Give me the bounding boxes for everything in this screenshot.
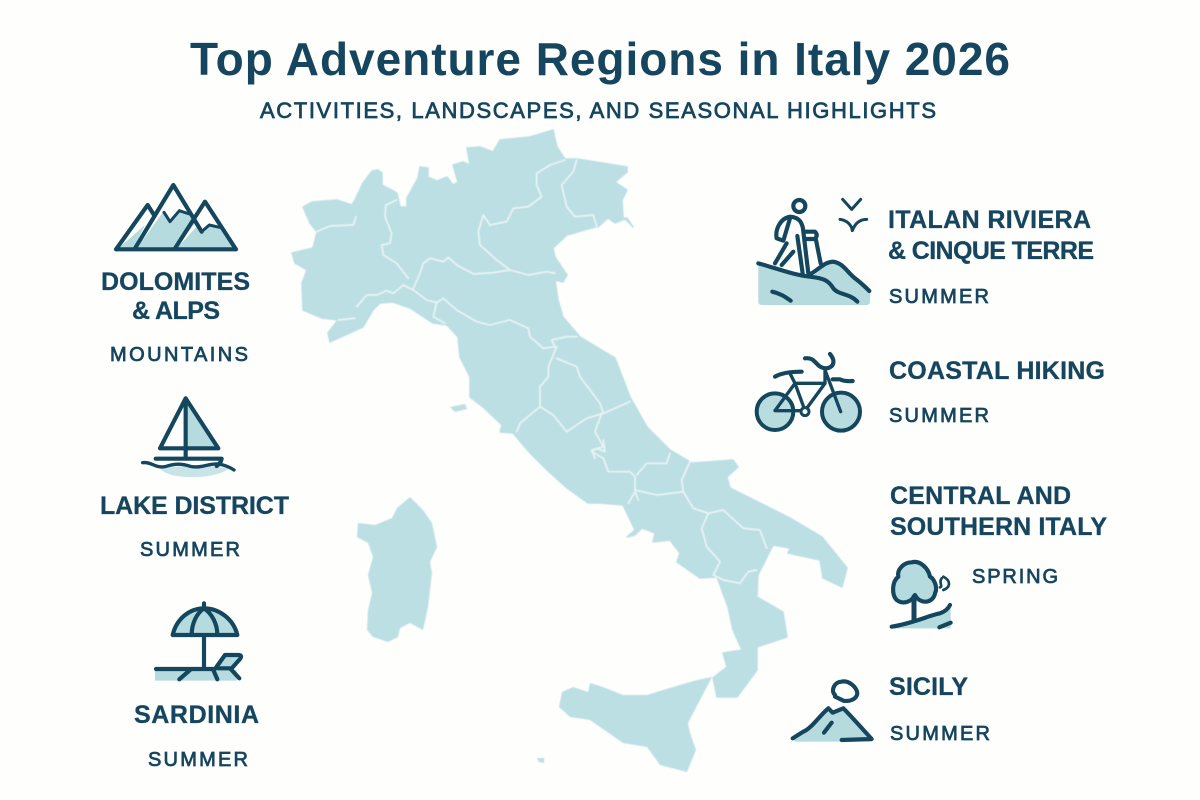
icon: volcano <box>793 681 872 742</box>
small islands <box>450 404 544 763</box>
icon: bicycle <box>757 354 860 431</box>
heading line 2: & CINQUE TERRE <box>888 237 1094 265</box>
map of Italy <box>292 130 847 772</box>
panel: Italian Riviera and Cinque Terre <box>758 199 1094 308</box>
season: SUMMER <box>140 539 240 561</box>
heading: LAKE DISTRICT <box>100 492 289 520</box>
title: Top Adventure Regions in Italy 2026 <box>190 33 1010 85</box>
Sardinia <box>357 497 437 642</box>
heading: ITALAN RIVIERA <box>888 206 1091 234</box>
panel: Central and Southern Italy <box>890 482 1107 628</box>
panel: Sardinia <box>134 603 259 771</box>
mainland Italy <box>292 130 847 697</box>
panel: Sicily <box>793 673 990 745</box>
icon: mountains <box>116 185 236 249</box>
season: SPRING <box>972 566 1058 588</box>
northern and central region borders <box>317 160 630 458</box>
subtitle: ACTIVITIES, LANDSCAPES, AND SEASONAL HIGHLIGHTS <box>260 98 936 123</box>
season: SUMMER <box>889 405 989 427</box>
heading line 2: SOUTHERN ITALY <box>890 513 1107 541</box>
season: SUMMER <box>890 723 990 745</box>
icon: beach umbrella and lounger <box>155 603 242 681</box>
heading: CENTRAL AND <box>890 482 1071 510</box>
Sicily <box>559 677 712 772</box>
season: SUMMER <box>148 749 248 771</box>
southern region borders <box>592 440 767 583</box>
heading: SICILY <box>889 673 968 701</box>
panel: Coastal Hiking <box>757 354 1105 431</box>
panel: Dolomites and Alps <box>101 185 250 366</box>
icon: hiker <box>758 199 870 305</box>
icon: sailboat <box>143 398 234 477</box>
heading: SARDINIA <box>134 701 259 729</box>
category: MOUNTAINS <box>110 344 248 366</box>
heading line 2: & ALPS <box>132 297 220 325</box>
icon: tree on a hill <box>892 561 951 628</box>
heading: DOLOMITES <box>101 268 250 296</box>
heading: COASTAL HIKING <box>889 357 1105 385</box>
season: SUMMER <box>889 286 989 308</box>
panel: Lake District <box>100 398 289 561</box>
